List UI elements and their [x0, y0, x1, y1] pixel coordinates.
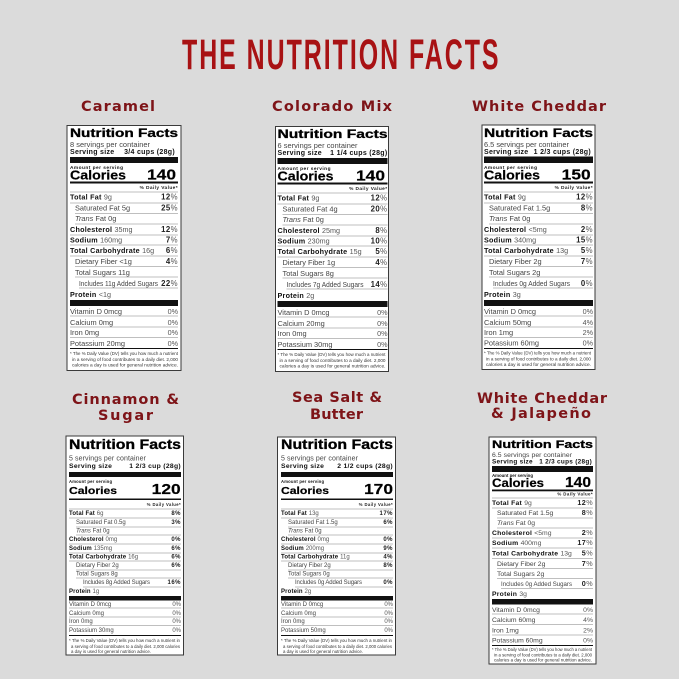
panel: Sea Salt & Butter label: Vitamin D 0mcg — [281, 602, 323, 608]
panel: White Cheddar & Jalapeño label: % Daily Value* — [557, 492, 593, 496]
panel: Colorado Mix label: 6 servings per container — [278, 141, 358, 150]
panel: Caramel label: calories a day is used for general nutrition advice. — [72, 362, 178, 368]
panel: White Cheddar & Jalapeño label: 0% — [582, 579, 593, 588]
panel: Sea Salt & Butter label: Potassium 50mg — [281, 628, 326, 634]
panel: White Cheddar & Jalapeño label: 2% — [583, 628, 593, 634]
panel: White Cheddar & Jalapeño label — [489, 437, 596, 664]
panel: White Cheddar & Jalapeño label: Includes 0g Added Sugars — [501, 581, 573, 588]
heading: Colorado Mix: Colorado Mix — [272, 99, 393, 115]
panel: Caramel label: Trans Fat 0g — [75, 214, 116, 223]
panel: Cinnamon & Sugar label: Potassium 30mg — [69, 628, 114, 634]
panel: Caramel label: 7% — [166, 236, 178, 244]
panel: White Cheddar label: Potassium 60mg — [484, 338, 539, 348]
panel: Cinnamon & Sugar label: 0% — [172, 611, 182, 617]
panel: Cinnamon & Sugar label: Cholesterol 0mg — [69, 537, 117, 543]
panel: Sea Salt & Butter label: Nutrition Facts — [281, 437, 393, 452]
panel: Sea Salt & Butter label — [278, 437, 396, 655]
heading: Cinnamon & Sugar — [72, 392, 179, 424]
panel: White Cheddar & Jalapeño label: 8% — [582, 508, 593, 517]
panel: White Cheddar label: 8% — [581, 204, 593, 212]
panel: White Cheddar & Jalapeño label: 7% — [582, 559, 593, 568]
heading: Sea Salt & Butter: Butter — [310, 407, 364, 423]
panel: Caramel label: 140 — [147, 168, 176, 184]
panel: Colorado Mix label: Protein 2g — [278, 291, 314, 300]
panel: Caramel label: 12% — [161, 225, 178, 234]
panel: White Cheddar & Jalapeño label: Serving size — [492, 458, 533, 466]
panel: White Cheddar label: * The % Daily Value (DV) tells you how much a nutrient — [484, 350, 592, 356]
panel: Cinnamon & Sugar label: 3% — [171, 520, 181, 526]
panel: White Cheddar label: Trans Fat 0g — [489, 214, 530, 223]
panel: White Cheddar & Jalapeño label: Total Sugars 2g — [497, 571, 544, 578]
panel: White Cheddar label: Total Fat 9g — [484, 192, 526, 202]
panel: Colorado Mix label: 0% — [377, 340, 388, 349]
panel: Sea Salt & Butter label: Iron 0mg — [281, 619, 305, 625]
panel: White Cheddar & Jalapeño label: Iron 1mg — [492, 628, 519, 634]
panel: Sea Salt & Butter label: Total Carbohydrate 11g — [281, 554, 350, 560]
panel: Caramel label: 12% — [161, 192, 178, 202]
panel: Caramel label: 22% — [161, 279, 178, 288]
panel: Sea Salt & Butter label: 4% — [383, 554, 393, 560]
panel: White Cheddar & Jalapeño label: Calories — [492, 478, 544, 490]
panel: Sea Salt & Butter label: 0% — [384, 619, 394, 625]
panel: Sea Salt & Butter label: 9% — [383, 546, 393, 552]
panel: Caramel label: Vitamin D 0mcg — [70, 307, 122, 316]
panel: White Cheddar label: 1 2/3 cups (28g) — [534, 149, 591, 156]
panel: Colorado Mix label: Cholesterol 25mg — [278, 226, 340, 235]
panel: Caramel label: % Daily Value* — [140, 185, 178, 191]
panel: Caramel label: Calories — [70, 168, 126, 182]
panel: Caramel label: in a serving of food contributes to a daily diet. 2,000 — [72, 357, 178, 362]
panel: Sea Salt & Butter label: Total Sugars 0g — [288, 572, 330, 578]
panel: Cinnamon & Sugar label: 5 servings per container — [69, 456, 147, 462]
panel: Colorado Mix label: Total Carbohydrate 15g — [278, 247, 362, 256]
panel: Cinnamon & Sugar label: 0% — [172, 628, 182, 634]
panel: Caramel label: 0% — [168, 339, 179, 348]
heading: Sea Salt & Butter: Sea Salt & — [292, 390, 382, 406]
panel: White Cheddar & Jalapeño label: 17% — [577, 538, 593, 547]
panel: White Cheddar label: 15% — [576, 236, 593, 244]
panel: Colorado Mix label: Total Fat 9g — [278, 194, 319, 202]
panel: Sea Salt & Butter label: 5 servings per container — [281, 456, 359, 462]
panel: Cinnamon & Sugar label: * The % Daily Value (DV) tells you how much a nutrient in — [69, 638, 181, 643]
panel: Cinnamon & Sugar label: Total Sugars 8g — [76, 572, 118, 578]
panel: White Cheddar label: 4% — [583, 318, 594, 327]
panel: Cinnamon & Sugar label: Iron 0mg — [69, 619, 93, 625]
panel: Cinnamon & Sugar label: Total Carbohydrate 16g — [69, 554, 138, 560]
panel: White Cheddar label: calories a day is used for general nutrition advice. — [486, 362, 591, 367]
panel: Caramel label: Saturated Fat 5g — [75, 204, 130, 212]
panel: Caramel label — [67, 126, 181, 370]
panel: Colorado Mix label: 4% — [375, 258, 388, 267]
panel: White Cheddar label: 2% — [581, 225, 593, 234]
panel: Sea Salt & Butter label: 8% — [383, 563, 393, 569]
panel: Caramel label: Serving size — [70, 149, 114, 156]
panel: Cinnamon & Sugar label: 6% — [171, 546, 181, 552]
panel: Cinnamon & Sugar label: 6% — [171, 563, 181, 569]
panel: Cinnamon & Sugar label: Calcium 0mg — [69, 611, 104, 617]
panel: Colorado Mix label: Total Sugars 8g — [282, 269, 334, 278]
panel: White Cheddar label: Cholesterol <5mg — [484, 225, 547, 234]
panel: White Cheddar label: Nutrition Facts — [484, 128, 593, 140]
panel: White Cheddar & Jalapeño label: Sodium 400mg — [492, 540, 542, 547]
panel: White Cheddar & Jalapeño label: in a serving of food contributes to a daily diet. 2,000 — [494, 652, 593, 658]
panel: White Cheddar label: Total Carbohydrate 13g — [484, 246, 568, 255]
panel: White Cheddar & Jalapeño label: Vitamin D 0mcg — [492, 607, 540, 614]
panel: Colorado Mix label: in a serving of food contributes to a daily diet. 2,000 — [280, 358, 386, 363]
panel: Cinnamon & Sugar label: Vitamin D 0mcg — [69, 602, 111, 608]
panel: White Cheddar label: 0% — [583, 338, 594, 348]
panel: White Cheddar & Jalapeño label: 5% — [582, 548, 593, 558]
panel: Colorado Mix label: Vitamin D 0mcg — [278, 308, 330, 317]
panel: White Cheddar & Jalapeño label: 1 2/3 cups (28g) — [539, 458, 592, 466]
title: THE NUTRITION FACTS — [182, 31, 501, 79]
panel: Caramel label: 8 servings per container — [70, 140, 151, 149]
panel: Sea Salt & Butter label: 2 1/2 cups (28g) — [337, 463, 393, 470]
panel: White Cheddar & Jalapeño label: 4% — [583, 617, 593, 624]
panel: Cinnamon & Sugar label: 0% — [172, 602, 182, 608]
panel: White Cheddar & Jalapeño label: 0% — [583, 607, 593, 614]
panel: Cinnamon & Sugar label: Sodium 135mg — [69, 546, 112, 552]
panel: Caramel label: 0% — [168, 318, 179, 327]
panel: White Cheddar label: 0% — [581, 279, 593, 288]
panel: White Cheddar & Jalapeño label: * The % Daily Value (DV) tells you how much a nutrient — [492, 647, 593, 652]
panel: Caramel label: 25% — [161, 204, 178, 212]
panel: Sea Salt & Butter label: 0% — [383, 580, 393, 586]
panel: Caramel label: Sodium 160mg — [70, 236, 122, 244]
panel: Colorado Mix label: 10% — [371, 236, 388, 246]
panel: White Cheddar label: 5% — [581, 246, 593, 255]
panel: White Cheddar label: Saturated Fat 1.5g — [489, 204, 550, 212]
panel: Cinnamon & Sugar label: 16% — [167, 580, 181, 586]
panel: White Cheddar & Jalapeño label: Nutrition Facts — [492, 439, 593, 451]
panel: Sea Salt & Butter label: Trans Fat 0g — [288, 528, 322, 534]
panel: White Cheddar label: Calcium 50mg — [484, 318, 531, 327]
panel: White Cheddar label: % Daily Value* — [555, 185, 593, 191]
panel: Sea Salt & Butter label: * The % Daily Value (DV) tells you how much a nutrient in — [281, 638, 393, 643]
panel: Cinnamon & Sugar label: Nutrition Facts — [69, 437, 181, 452]
panel: White Cheddar & Jalapeño label: 2% — [582, 528, 593, 537]
panel: Caramel label: Nutrition Facts — [70, 128, 178, 140]
panel: Cinnamon & Sugar label: 6% — [171, 554, 181, 560]
panel: White Cheddar label: Serving size — [484, 149, 528, 156]
panel: Cinnamon & Sugar label: a serving of food contributes to a daily diet. 2,000 calories — [71, 644, 180, 649]
panel: White Cheddar & Jalapeño label: calories a day is used for general nutrition advice. — [494, 658, 592, 662]
panel: Cinnamon & Sugar label: Amount per serving — [69, 479, 112, 484]
panel: Caramel label: Total Sugars 11g — [75, 268, 130, 277]
panel: Sea Salt & Butter label: 17% — [379, 511, 393, 517]
panel: White Cheddar label: Total Sugars 2g — [489, 268, 540, 277]
panel: Sea Salt & Butter label: 0% — [384, 628, 394, 634]
panel: Colorado Mix label: 140 — [356, 168, 385, 184]
panel: Sea Salt & Butter label: Saturated Fat 1.5g — [288, 520, 338, 526]
panel: White Cheddar label: 6.5 servings per container — [484, 140, 570, 149]
panel: White Cheddar & Jalapeño label: 140 — [565, 475, 591, 491]
panel: Cinnamon & Sugar label — [66, 436, 184, 655]
panel: Caramel label: Cholesterol 35mg — [70, 225, 133, 234]
heading: Sea Salt & Butter — [292, 390, 382, 423]
panel: White Cheddar label: Sodium 340mg — [484, 236, 536, 244]
panel: Cinnamon & Sugar label: 0% — [172, 619, 182, 625]
panel: White Cheddar label: Protein 3g — [484, 290, 521, 299]
panel: White Cheddar & Jalapeño label: Cholesterol <5mg — [492, 530, 552, 537]
panel: Colorado Mix label: 1 1/4 cups (28g) — [330, 150, 388, 157]
heading: White Cheddar & Jalapeño — [477, 391, 608, 422]
panel: White Cheddar label: Calories — [484, 168, 540, 182]
panel: Colorado Mix label: 0% — [377, 319, 388, 328]
panel: Caramel label: * The % Daily Value (DV) tells you how much a nutrient — [70, 351, 179, 356]
heading: Caramel: Caramel — [81, 99, 155, 115]
panel: Sea Salt & Butter label: Serving size — [281, 463, 324, 470]
panel: White Cheddar & Jalapeño label: Saturated Fat 1.5g — [497, 510, 554, 517]
panel: White Cheddar & Jalapeño label: Total Fat 9g — [492, 500, 532, 507]
panel: Colorado Mix label: Iron 0mg — [278, 329, 307, 338]
panel: Caramel label: Total Carbohydrate 16g — [70, 246, 154, 255]
panel: White Cheddar label: 7% — [581, 257, 593, 266]
panel: Colorado Mix label: 0% — [377, 308, 388, 317]
panel: Cinnamon & Sugar label: Protein 1g — [69, 589, 99, 595]
panel: Sea Salt & Butter label: % Daily Value* — [359, 502, 393, 507]
panel: White Cheddar & Jalapeño label: Calcium 60mg — [492, 617, 536, 624]
panel: Cinnamon & Sugar label: 120 — [152, 481, 181, 498]
panel: Sea Salt & Butter label: Calories — [281, 485, 329, 497]
panel: Cinnamon & Sugar label: % Daily Value* — [147, 502, 181, 507]
panel: White Cheddar label: 0% — [583, 307, 594, 316]
panel: Colorado Mix label: Nutrition Facts — [278, 129, 387, 141]
panel: Colorado Mix label: Sodium 230mg — [278, 236, 330, 246]
heading: Cinnamon & Sugar: Cinnamon & — [72, 392, 179, 408]
panel: White Cheddar & Jalapeño label: Protein 3g — [492, 591, 527, 598]
panel: Colorado Mix label: Trans Fat 0g — [282, 215, 324, 224]
panel: White Cheddar label: in a serving of food contributes to a daily diet. 2,000 — [486, 356, 591, 362]
panel: Colorado Mix label: % Daily Value* — [349, 186, 388, 192]
panel: Sea Salt & Butter label: a day is used for general nutrition advice. — [283, 649, 363, 654]
panel: Colorado Mix label: 0% — [377, 329, 388, 338]
panel: Caramel label: Dietary Fiber <1g — [75, 257, 132, 266]
panel: Sea Salt & Butter label: 0% — [383, 537, 393, 543]
panel: Colorado Mix label: 20% — [371, 204, 388, 214]
panel: Cinnamon & Sugar label: 0% — [171, 537, 181, 543]
panel: Cinnamon & Sugar label: Serving size — [69, 463, 112, 470]
panel: Colorado Mix label: 5% — [375, 247, 388, 256]
panel: Cinnamon & Sugar label: Calories — [69, 485, 117, 497]
panel: Caramel label: Amount per serving — [70, 165, 123, 171]
panel: Sea Salt & Butter label: Includes 0g Added Sugars — [295, 580, 362, 586]
panel: Caramel label: Calcium 0mg — [70, 318, 113, 327]
panel: Colorado Mix label: * The % Daily Value (DV) tells you how much a nutrient — [278, 352, 386, 357]
panel: Sea Salt & Butter label: Protein 2g — [281, 589, 311, 595]
panel: Colorado Mix label: Calcium 20mg — [278, 319, 325, 328]
panel: Sea Salt & Butter label: Cholesterol 0mg — [281, 537, 329, 543]
panel: White Cheddar & Jalapeño label: Dietary Fiber 2g — [497, 561, 546, 568]
heading: White Cheddar & Jalapeño: White Cheddar — [477, 391, 608, 407]
panel: Colorado Mix label: 8% — [375, 226, 388, 235]
panel: White Cheddar label: 2% — [583, 328, 594, 337]
panel: White Cheddar label: Dietary Fiber 2g — [489, 257, 542, 266]
panel: Colorado Mix label: calories a day is used for general nutrition advice. — [280, 364, 386, 368]
panel: Cinnamon & Sugar label: Trans Fat 0g — [76, 528, 110, 534]
heading: White Cheddar & Jalapeño: & Jalapeño — [491, 406, 591, 422]
panel: White Cheddar label: 12% — [576, 192, 593, 202]
panel: White Cheddar & Jalapeño label: 12% — [577, 498, 593, 507]
panel: Sea Salt & Butter label: a serving of food contributes to a daily diet. 2,000 calories — [283, 644, 392, 649]
panel: Caramel label: 3/4 cups (28g) — [124, 149, 175, 156]
panel: Cinnamon & Sugar label: a day is used for general nutrition advice. — [71, 649, 151, 654]
heading: White Cheddar: White Cheddar — [472, 99, 607, 115]
panel: Caramel label: 0% — [168, 307, 179, 316]
panel: Sea Salt & Butter label: 0% — [384, 611, 394, 617]
panel: Sea Salt & Butter label: 6% — [383, 520, 393, 526]
panel: Sea Salt & Butter label: Dietary Fiber 2g — [288, 563, 331, 569]
panel: Cinnamon & Sugar label: Includes 8g Added Sugars — [83, 580, 150, 586]
panel: Colorado Mix label: Calories — [278, 170, 334, 184]
heading: Cinnamon & Sugar: Sugar — [98, 408, 154, 424]
panel: Cinnamon & Sugar label: Total Fat 6g — [69, 511, 103, 517]
panel: White Cheddar label: Amount per serving — [484, 165, 537, 171]
panel: Cinnamon & Sugar label: 1 2/3 cup (28g) — [129, 463, 181, 470]
panel: Colorado Mix label: Serving size — [278, 150, 322, 157]
panel: Cinnamon & Sugar label: Dietary Fiber 2g — [76, 563, 119, 569]
panel: Sea Salt & Butter label: 0% — [384, 602, 394, 608]
panel: Caramel label: 6% — [166, 246, 178, 255]
panel: Colorado Mix label — [276, 126, 388, 372]
panel: White Cheddar & Jalapeño label: 0% — [583, 638, 593, 644]
panel: Caramel label: 0% — [168, 328, 179, 337]
panel: Colorado Mix label: 12% — [371, 194, 388, 202]
panel: White Cheddar label — [482, 125, 595, 370]
panel: Colorado Mix label: Dietary Fiber 1g — [282, 258, 335, 267]
panel: Colorado Mix label: Saturated Fat 4g — [282, 204, 338, 214]
panel: Caramel label: Iron 0mg — [70, 328, 99, 337]
panel: White Cheddar & Jalapeño label: Trans Fat 0g — [497, 520, 535, 527]
panel: Sea Salt & Butter label: 170 — [364, 481, 393, 498]
panel: White Cheddar label: 150 — [562, 168, 591, 184]
panel: Sea Salt & Butter label: Calcium 0mg — [281, 611, 316, 617]
panel: White Cheddar & Jalapeño label: Total Carbohydrate 13g — [492, 550, 572, 558]
panel: Caramel label: 4% — [166, 257, 178, 266]
panel: Sea Salt & Butter label: Amount per serving — [281, 479, 324, 484]
panel: White Cheddar label: Vitamin D 0mcg — [484, 307, 536, 316]
panel: Sea Salt & Butter label: Total Fat 13g — [281, 511, 319, 517]
panel: Colorado Mix label: 14% — [371, 280, 388, 289]
panel: Sea Salt & Butter label: Sodium 200mg — [281, 546, 324, 552]
panel: Cinnamon & Sugar label: Saturated Fat 0.5g — [76, 520, 126, 526]
panel: Colorado Mix label: Includes 7g Added Sugars — [286, 280, 364, 289]
panel: Caramel label: Total Fat 9g — [70, 192, 112, 202]
panel: Colorado Mix label: Amount per serving — [278, 166, 331, 172]
panel: White Cheddar & Jalapeño label: 6.5 servings per container — [492, 452, 573, 459]
panel: White Cheddar label: Iron 1mg — [484, 328, 513, 337]
panel: White Cheddar & Jalapeño label: Potassium 60mg — [492, 638, 543, 644]
panel: White Cheddar & Jalapeño label: Amount per serving — [492, 473, 533, 478]
panel: Caramel label: Includes 11g Added Sugars — [79, 279, 158, 288]
panel: Cinnamon & Sugar label: 8% — [171, 511, 181, 517]
panel: Caramel label: Potassium 20mg — [70, 339, 125, 348]
panel: White Cheddar label: Includes 0g Added Sugars — [493, 279, 570, 288]
panel: Caramel label: Protein <1g — [70, 290, 111, 299]
panel: Colorado Mix label: Potassium 30mg — [278, 340, 333, 349]
